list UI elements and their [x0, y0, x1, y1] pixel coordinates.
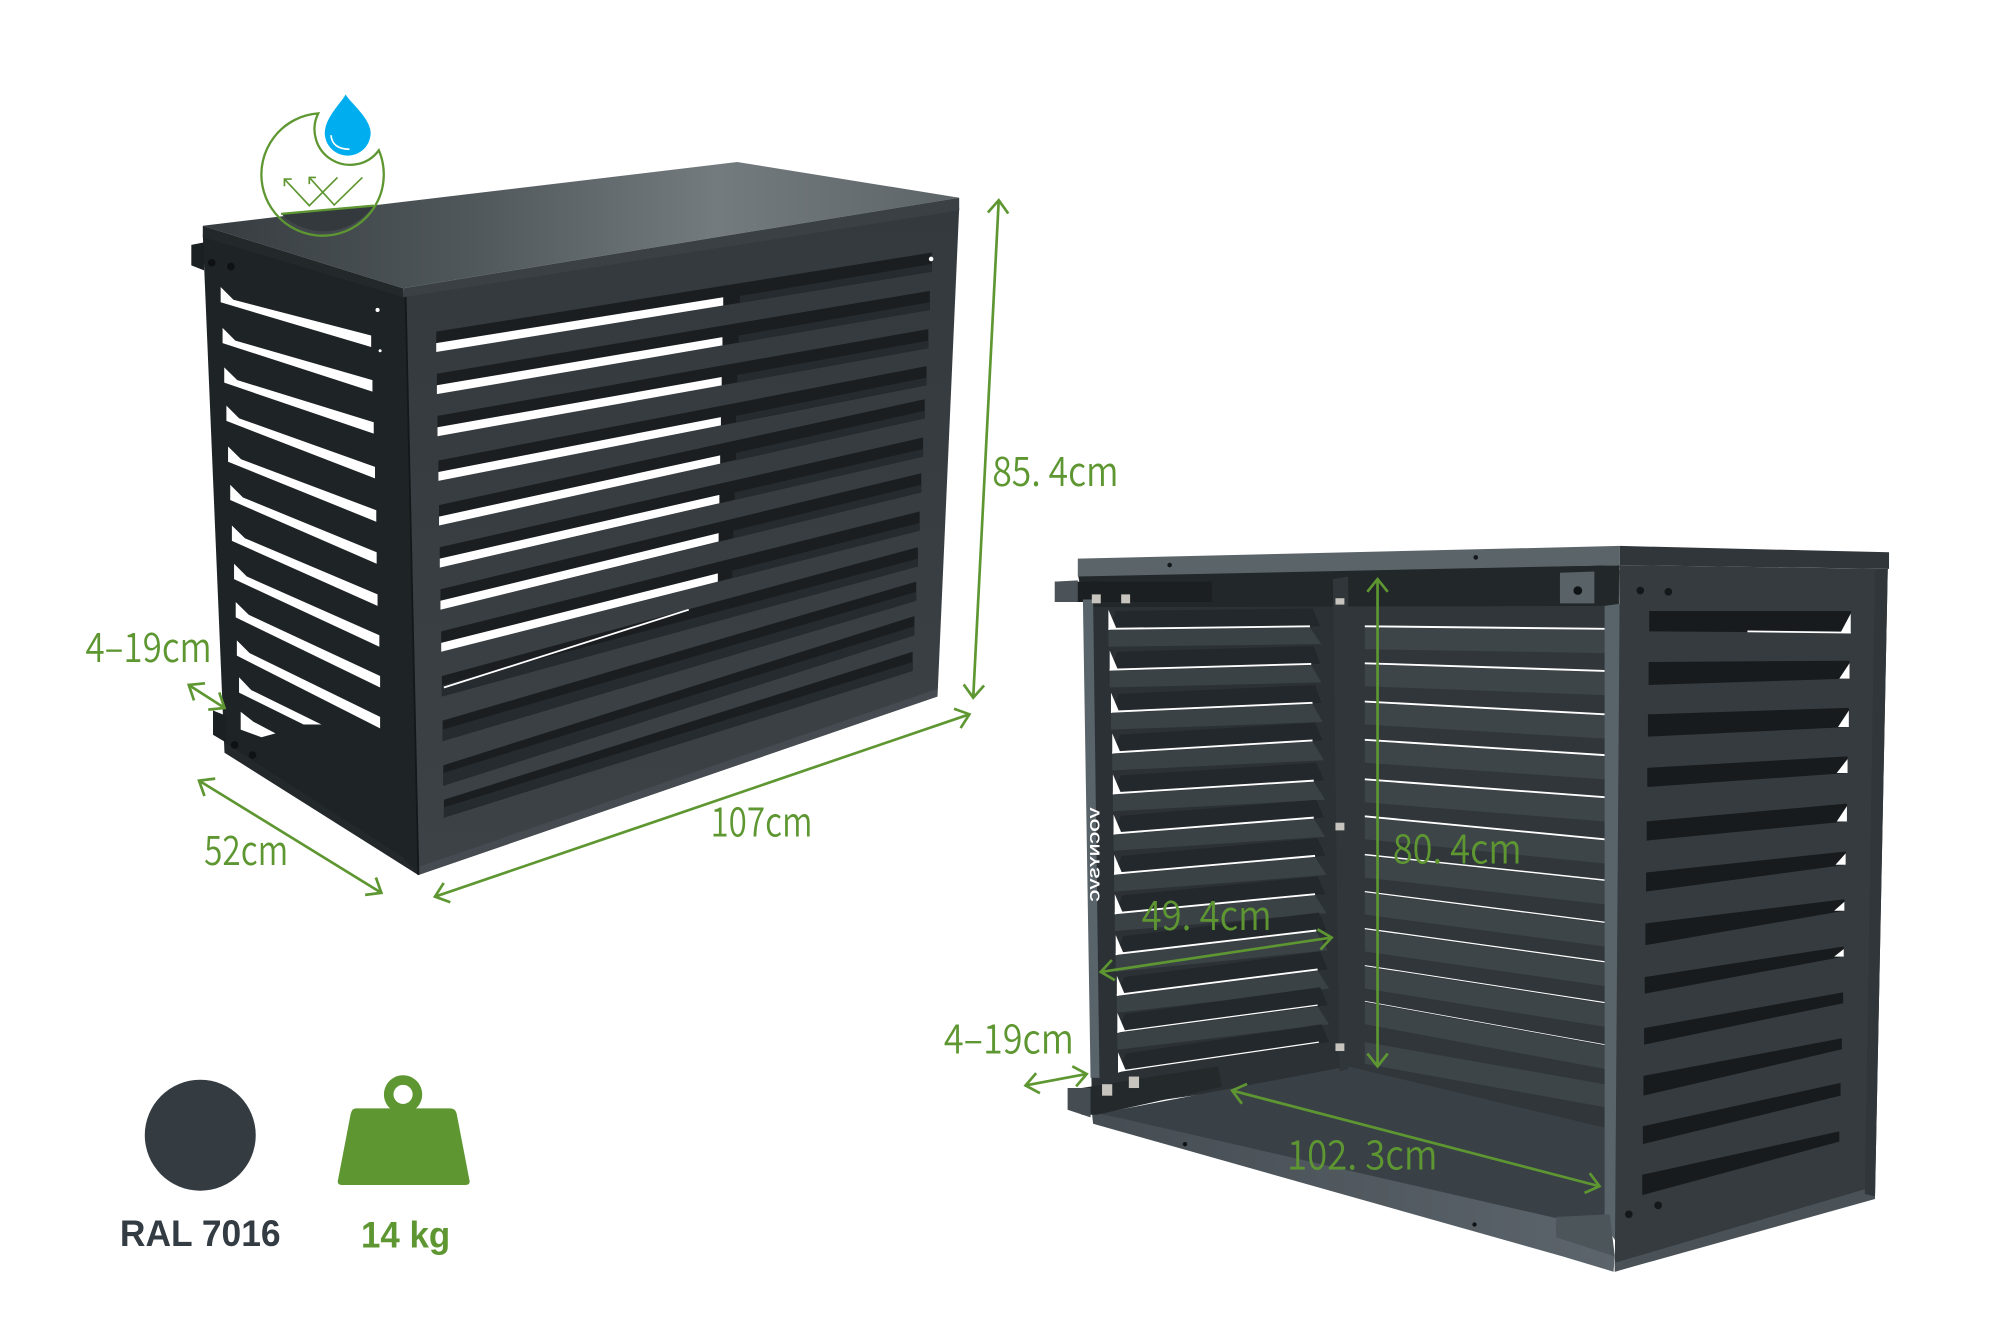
- label: height: 85. 4cm: [992, 439, 1119, 498]
- product: open cover, rear view: [1055, 546, 1889, 1272]
- floor: [1082, 1066, 1615, 1272]
- arrow: width 107cm: [435, 714, 969, 897]
- side panel: [191, 235, 418, 875]
- label: colour: RAL 7016: [120, 1213, 281, 1254]
- frame posts: [1055, 571, 1622, 1256]
- label: weight: 14 kg: [361, 1214, 450, 1255]
- arrow: wall gap rear: [1026, 1074, 1087, 1085]
- arrow: inner width: [1232, 1091, 1599, 1186]
- arrow: wall gap: [189, 685, 224, 708]
- icon: water-repellent surface: [261, 94, 384, 236]
- label: width: 107cm: [710, 790, 813, 849]
- top rim: [1078, 546, 1889, 577]
- top panel: [203, 162, 959, 297]
- label: wall gap rear: 4–19cm: [944, 1007, 1074, 1066]
- back walls: [1055, 565, 1620, 1154]
- arrow: height 85.4cm: [973, 200, 999, 698]
- icon: weight: [338, 1075, 470, 1185]
- left wall louvres: [1108, 608, 1329, 1073]
- front panel: [406, 208, 959, 875]
- product: closed cover, front three-quarter view: [191, 162, 959, 875]
- label: wall gap: 4–19cm: [85, 615, 212, 674]
- icon: water drop: [325, 94, 371, 156]
- arrow: depth 52cm: [199, 781, 381, 893]
- right wall louvres: [1365, 626, 1605, 1107]
- arrow: inner height: [1377, 579, 1379, 1066]
- label: depth: 52cm: [204, 818, 288, 877]
- side face with louvres: [1615, 565, 1888, 1272]
- colour swatch: [145, 1080, 256, 1191]
- arrow: inner depth: [1101, 938, 1332, 972]
- label: inner height: 80. 4cm: [1393, 817, 1522, 876]
- label: inner width: 102. 3cm: [1287, 1123, 1437, 1182]
- brand text: VOCNYSVC: [1086, 807, 1102, 902]
- label: inner depth: 49. 4cm: [1142, 883, 1272, 942]
